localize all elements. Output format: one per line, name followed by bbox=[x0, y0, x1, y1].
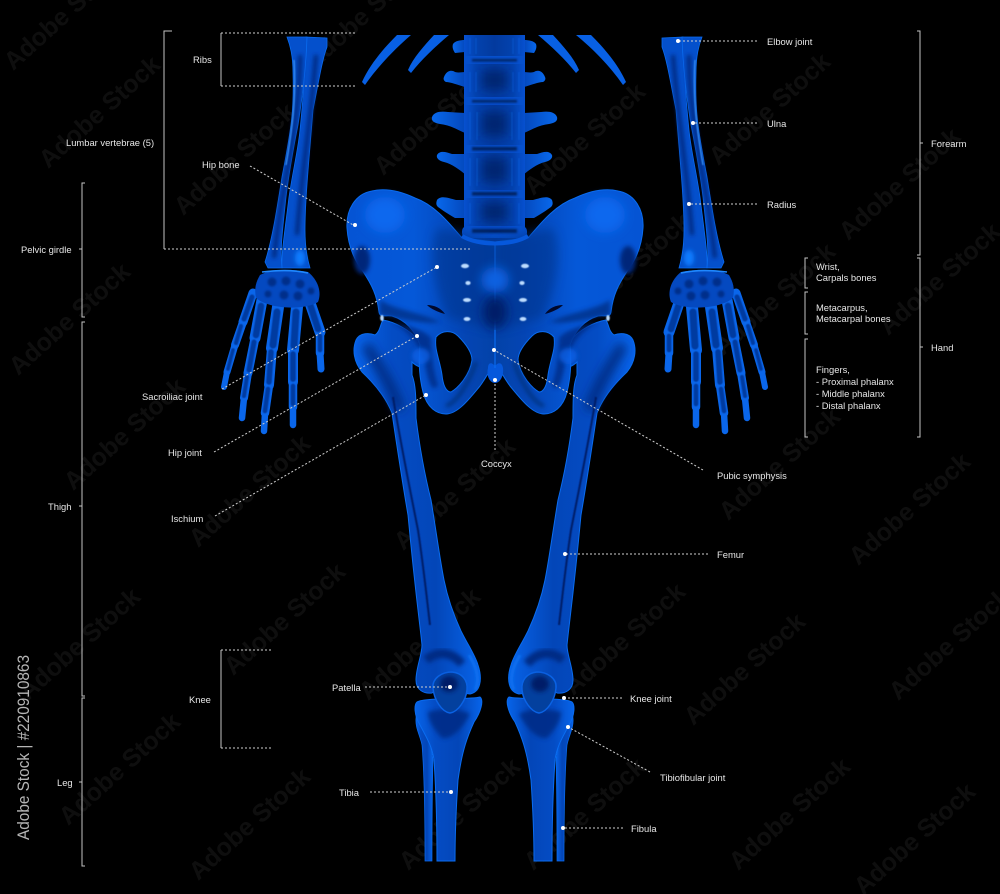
watermark pattern: Adobe Stock bbox=[369, 57, 501, 181]
label: fingers: - Proximal phalanx bbox=[816, 376, 894, 387]
watermark pattern: Adobe Stock bbox=[679, 607, 811, 731]
watermark pattern: Adobe Stock bbox=[219, 557, 351, 681]
watermark pattern: Adobe Stock bbox=[354, 582, 486, 706]
label: hip joint: Hip joint bbox=[168, 447, 202, 458]
lumbar vertebrae bbox=[432, 35, 557, 243]
bracket: metacarpus bbox=[805, 292, 808, 334]
left hand bbox=[224, 270, 321, 431]
left femur bbox=[354, 320, 480, 694]
bracket: ribs bbox=[221, 33, 355, 86]
right hand bbox=[668, 270, 765, 431]
leader: hip joint bbox=[214, 334, 419, 452]
label: sacroiliac joint: Sacroiliac joint bbox=[142, 391, 203, 402]
label: wrist, carpals: Wrist, bbox=[816, 261, 840, 272]
leader: ischium bbox=[215, 393, 428, 516]
watermark pattern: Adobe Stock bbox=[389, 432, 521, 556]
leader: pubic symphysis bbox=[492, 348, 703, 470]
watermark pattern: Adobe Stock bbox=[519, 77, 651, 201]
stock image id: Adobe Stock | #220910863 bbox=[14, 655, 33, 840]
leader: tibiofibular joint bbox=[566, 725, 650, 772]
bracket: wrist bbox=[805, 258, 808, 288]
right femur bbox=[509, 320, 635, 694]
bracket: pelvic girdle bbox=[79, 183, 85, 317]
label: pubic symphysis: Pubic symphysis bbox=[717, 470, 787, 481]
label: patella: Patella bbox=[332, 682, 361, 693]
watermark pattern: Adobe Stock bbox=[54, 707, 186, 831]
watermark pattern: Adobe Stock bbox=[714, 402, 846, 526]
watermark pattern: Adobe Stock bbox=[169, 97, 301, 221]
leader: knee joint bbox=[562, 696, 622, 700]
left forearm bbox=[265, 37, 327, 268]
label: fingers: - Middle phalanx bbox=[816, 388, 885, 399]
label: elbow joint: Elbow joint bbox=[767, 36, 813, 47]
label: hip bone: Hip bone bbox=[202, 159, 240, 170]
leader: patella bbox=[365, 685, 452, 689]
bracket: thigh bbox=[79, 322, 85, 696]
watermark pattern: Adobe Stock bbox=[14, 582, 146, 706]
watermark pattern: Adobe Stock bbox=[834, 122, 966, 246]
bracket: leg bbox=[79, 698, 85, 866]
bracket: lumbar vertebrae bbox=[164, 31, 470, 249]
bracket: forearm bbox=[917, 31, 923, 255]
watermark pattern: Adobe Stock bbox=[709, 237, 841, 361]
leader: coccyx bbox=[493, 378, 497, 450]
label: metacarpus: Metacarpus, bbox=[816, 302, 868, 313]
pelvis bbox=[347, 190, 643, 414]
label: ulna: Ulna bbox=[767, 118, 787, 129]
bracket: knee bbox=[221, 650, 272, 748]
skeleton illustration bbox=[224, 35, 765, 861]
leader: ulna bbox=[691, 121, 757, 125]
bracket: fingers bbox=[805, 339, 808, 437]
label: lumbar vertebrae: Lumbar vertebrae (5) bbox=[66, 137, 154, 148]
label: pelvic girdle: Pelvic girdle bbox=[21, 244, 72, 255]
label: knee: Knee bbox=[189, 694, 211, 705]
label: ribs: Ribs bbox=[193, 54, 212, 65]
leader: hip bone bbox=[250, 166, 357, 227]
label: fingers: Fingers, bbox=[816, 364, 850, 375]
label: radius: Radius bbox=[767, 199, 796, 210]
leader: sacroiliac joint bbox=[222, 265, 439, 389]
label: thigh: Thigh bbox=[48, 501, 71, 512]
right forearm bbox=[662, 37, 724, 268]
label: hand: Hand bbox=[931, 342, 953, 353]
watermark pattern: Adobe Stock bbox=[59, 372, 191, 496]
label: forearm: Forearm bbox=[931, 138, 967, 149]
watermark pattern: Adobe Stock bbox=[724, 752, 856, 876]
watermark pattern: Adobe Stock bbox=[184, 429, 316, 553]
watermark pattern: Adobe Stock bbox=[704, 47, 836, 171]
leader: femur bbox=[563, 552, 708, 556]
bracket: hand bbox=[917, 258, 923, 437]
label: wrist, carpals: Carpals bones bbox=[816, 272, 877, 283]
label: metacarpus: Metacarpal bones bbox=[816, 313, 891, 324]
watermark pattern: Adobe Stock bbox=[564, 207, 696, 331]
femoral heads bbox=[412, 348, 577, 364]
watermark pattern: Adobe Stock bbox=[519, 752, 651, 876]
watermark pattern: Adobe Stock bbox=[34, 50, 166, 174]
label: tibia: Tibia bbox=[339, 787, 360, 798]
right lower leg bbox=[507, 672, 574, 861]
leader: fibula bbox=[561, 826, 623, 830]
label: ischium: Ischium bbox=[171, 513, 203, 524]
ribs bbox=[362, 35, 626, 85]
watermark pattern: Adobe Stock bbox=[559, 577, 691, 701]
leader: elbow joint bbox=[676, 39, 757, 43]
label: coccyx: Coccyx bbox=[481, 458, 512, 469]
left lower leg bbox=[415, 672, 482, 861]
watermark pattern: Adobe Stock bbox=[4, 257, 136, 381]
label: fibula: Fibula bbox=[631, 823, 657, 834]
watermark pattern: Adobe Stock bbox=[184, 762, 316, 886]
label: knee joint: Knee joint bbox=[630, 693, 672, 704]
label: leg: Leg bbox=[57, 777, 73, 788]
leader: tibia bbox=[370, 790, 453, 794]
leader: radius bbox=[687, 202, 757, 206]
watermark pattern: Adobe Stock bbox=[394, 752, 526, 876]
watermark pattern: Adobe Stock bbox=[844, 447, 976, 571]
label: tibiofibular joint: Tibiofibular joint bbox=[660, 772, 726, 783]
label: femur: Femur bbox=[717, 549, 744, 560]
label: fingers: - Distal phalanx bbox=[816, 400, 881, 411]
